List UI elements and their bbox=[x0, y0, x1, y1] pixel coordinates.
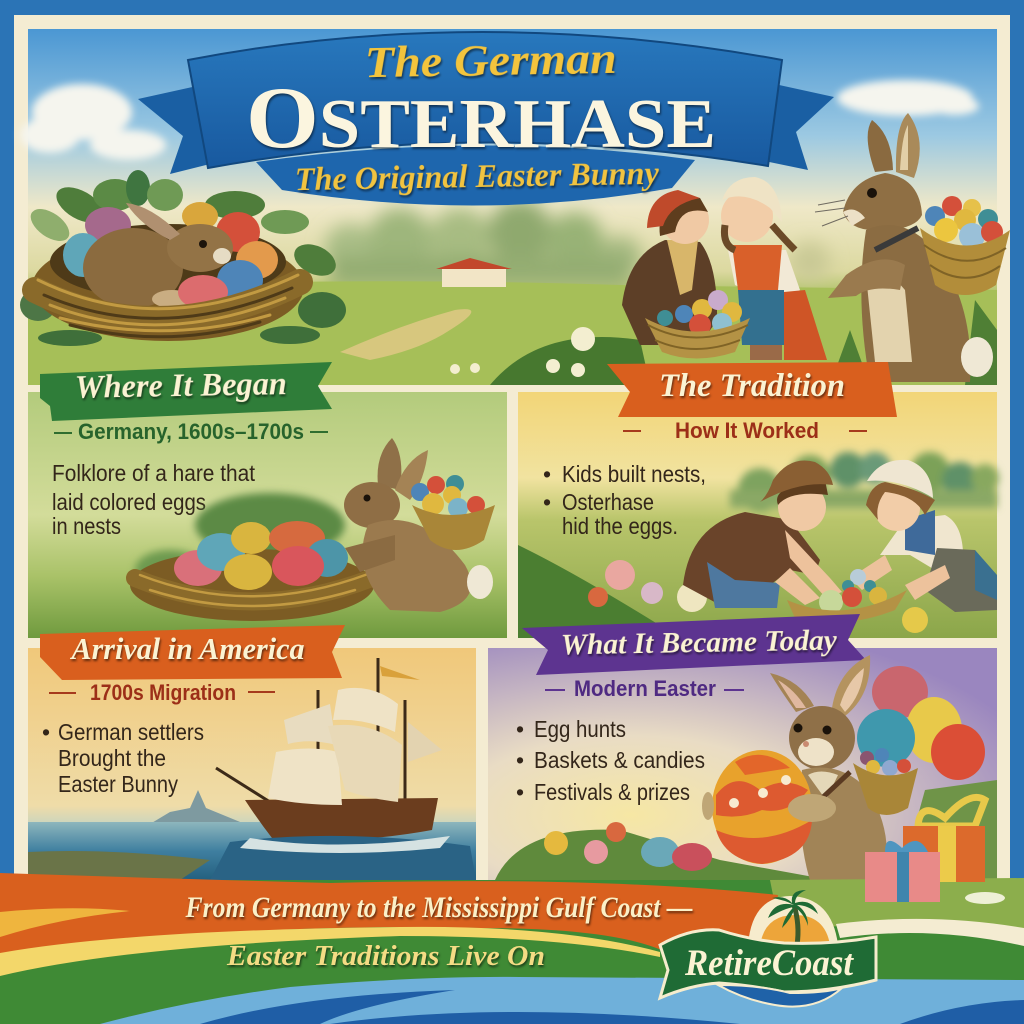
girl bbox=[721, 177, 827, 360]
footer line one: From Germany to the Mississippi Gulf Coast — bbox=[185, 891, 692, 924]
body text: settlers: • bbox=[42, 719, 50, 745]
body text: folklore: Folklore of a hare that bbox=[52, 460, 256, 486]
ribbon heading: where it began bbox=[40, 362, 332, 421]
illustration: bunny with giant egg bbox=[702, 655, 918, 887]
illustration: gift boxes bbox=[865, 797, 1005, 904]
body text: bullets: Osterhase bbox=[562, 489, 654, 515]
water bbox=[100, 977, 1024, 1024]
ribbon heading: the tradition bbox=[607, 362, 897, 417]
cream strip bbox=[836, 919, 1024, 946]
foliage bbox=[20, 170, 346, 346]
body text: bullets: Festivals & prizes bbox=[534, 779, 690, 805]
panel: sky and meadow hero scene bbox=[20, 29, 997, 385]
title line two: OSTERHASE bbox=[246, 70, 716, 167]
body text: settlers: German settlers bbox=[58, 719, 204, 745]
boy bbox=[622, 190, 717, 345]
body text: bullets: • bbox=[516, 716, 524, 742]
nest bowl bbox=[32, 233, 304, 341]
body text: bullets bbox=[516, 716, 705, 805]
banner right tail bbox=[750, 83, 834, 170]
body text: bullets: Egg hunts bbox=[534, 716, 626, 742]
body text: folklore: laid colored eggs bbox=[52, 489, 206, 515]
body text: settlers: Brought the bbox=[58, 745, 166, 771]
sea bbox=[28, 822, 476, 880]
ribbon heading: where it began: Where It Began bbox=[75, 366, 287, 406]
footer band bbox=[0, 873, 1024, 1024]
basket of eggs bbox=[645, 290, 750, 358]
body text: settlers bbox=[42, 719, 204, 797]
illustration: nest of eggs bbox=[787, 569, 907, 622]
illustration: flowers and ground bbox=[495, 780, 997, 880]
body text: folklore bbox=[52, 460, 256, 539]
body text: bullets: • bbox=[543, 461, 551, 487]
subheading: modern easter: Modern Easter bbox=[574, 676, 716, 701]
small yellow swoosh bbox=[0, 908, 130, 937]
panel: where it began bbox=[28, 362, 507, 638]
footer line two: Easter Traditions Live On bbox=[226, 941, 545, 972]
body text: bullets: hid the eggs. bbox=[562, 513, 678, 539]
illustration: bunny in nest bbox=[20, 170, 346, 346]
distant city bbox=[150, 790, 245, 824]
body text: bullets: • bbox=[543, 489, 551, 515]
logo wave bbox=[718, 985, 842, 1007]
eggs front bbox=[178, 260, 263, 309]
ribbon heading: what it became today: What It Became Today bbox=[561, 624, 838, 661]
rabbit bbox=[83, 203, 233, 308]
illustration: balloons bbox=[872, 666, 985, 780]
logo wordmark: RetireCoast bbox=[684, 943, 855, 984]
illustration: standing bunny with basket bbox=[815, 113, 1010, 382]
eggs behind bbox=[63, 202, 278, 279]
grass strip bbox=[770, 878, 1024, 932]
logo: RetireCoast bbox=[660, 890, 876, 1007]
banner left tail bbox=[138, 84, 226, 174]
panel: what it became today bbox=[488, 614, 997, 887]
illustration: boy kneeling bbox=[683, 460, 842, 608]
body text: folklore: in nests bbox=[52, 513, 121, 539]
illustration: trees and flowers bbox=[518, 452, 999, 638]
body text: bullets: • bbox=[516, 747, 524, 773]
panel: arrival in america bbox=[28, 625, 476, 880]
body text: bullets: Baskets & candies bbox=[534, 747, 705, 773]
ribbon heading: arrival in america: Arrival in America bbox=[70, 631, 305, 666]
subheading: Germany, 1600s–1700s: Germany, 1600s–1700s bbox=[78, 419, 304, 444]
body text: settlers: Easter Bunny bbox=[58, 771, 178, 797]
panel: the tradition bbox=[518, 362, 999, 638]
ribbon heading: what it became today bbox=[522, 614, 866, 675]
teal egg and basket bbox=[853, 709, 918, 815]
illustration: girl kneeling bbox=[850, 460, 997, 612]
subheading: 1700s migration: 1700s Migration bbox=[90, 680, 236, 705]
orange band bbox=[0, 873, 778, 954]
subheading: how it worked: How It Worked bbox=[675, 418, 819, 443]
dark water swooshes bbox=[200, 990, 1024, 1024]
ribbon heading: arrival in america bbox=[40, 625, 345, 680]
illustration: children with basket bbox=[622, 177, 827, 360]
illustration: nest and hare bbox=[130, 438, 495, 621]
icon: palm tree bbox=[768, 890, 818, 945]
subtitle: The Original Easter Bunny bbox=[295, 156, 659, 198]
body text: bullets: Kids built nests, bbox=[562, 461, 706, 487]
banner main ribbon bbox=[188, 32, 782, 168]
title line one: The German bbox=[364, 34, 617, 87]
body text: bullets bbox=[543, 461, 706, 539]
logo ribbon bbox=[660, 930, 876, 998]
nest rim twigs bbox=[35, 275, 300, 337]
body text: bullets: • bbox=[516, 779, 524, 805]
ribbon heading: the tradition: The Tradition bbox=[659, 368, 845, 404]
title banner bbox=[138, 32, 834, 206]
illustration: sailing ship bbox=[28, 658, 476, 880]
yellow band bbox=[0, 927, 660, 976]
banner lower ribbon bbox=[256, 145, 695, 206]
